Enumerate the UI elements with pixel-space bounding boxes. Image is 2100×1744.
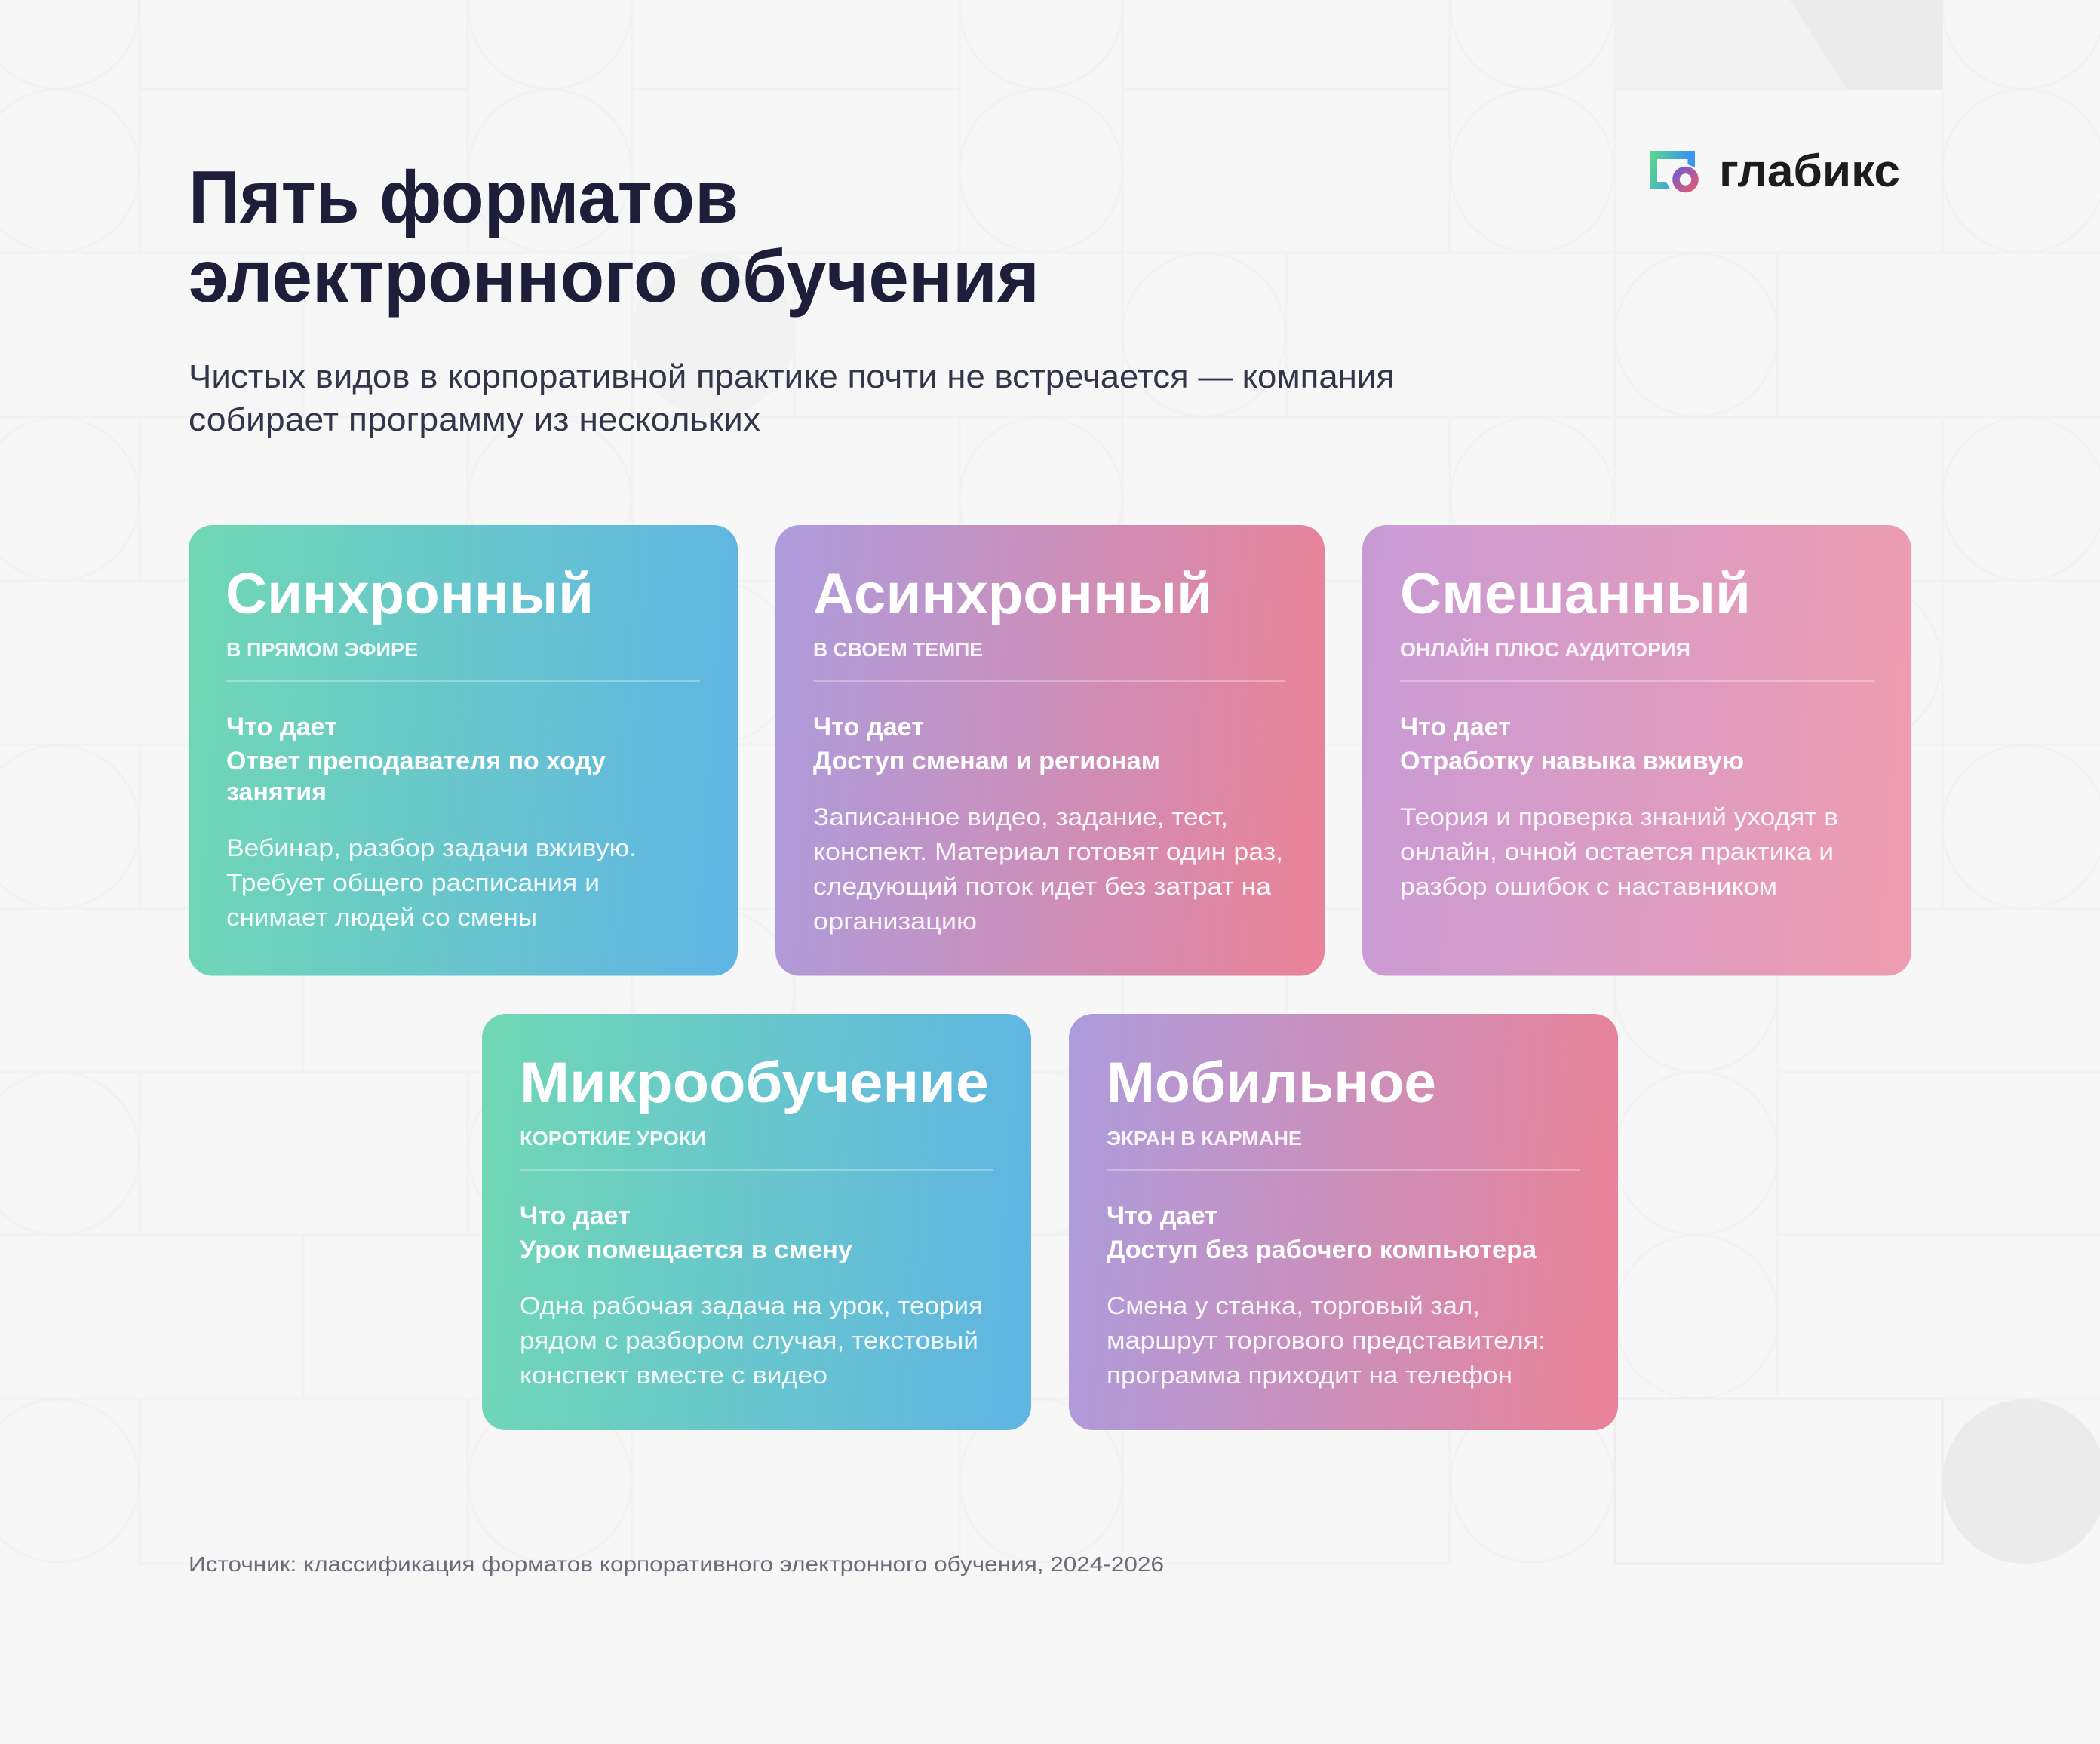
subtitle: собирает программу из нескольких [189, 401, 760, 438]
card description: Вебинар, разбор задачи вживую. [226, 834, 637, 861]
card description: Теория и проверка знаний уходят в [1400, 803, 1838, 831]
card benefit [1107, 1202, 1537, 1264]
card label: ЭКРАН В КАРМАНЕ [1107, 1127, 1302, 1150]
source note: Источник: классификация форматов корпоративного электронного обучения, 2024-2026 [189, 1552, 1164, 1576]
card benefit [520, 1202, 852, 1264]
card description: онлайн, очной остается практика и [1400, 838, 1834, 865]
card description: разбор ошибок с наставником [1400, 873, 1777, 900]
title [189, 155, 1039, 318]
card heading: Синхронный [226, 562, 594, 626]
card description: Смена у станка, торговый зал, [1107, 1292, 1480, 1319]
icon: logo ring [1676, 170, 1695, 189]
card description: следующий поток идет без затрат на [813, 873, 1271, 900]
logo wordmark: глабикс [1719, 146, 1900, 196]
card description: Одна рабочая задача на урок, теория [520, 1292, 983, 1319]
panel: Микрообучение [482, 1014, 1031, 1430]
panel: Смешанный [1362, 525, 1911, 976]
card description: маршрут торгового представителя: [1107, 1327, 1546, 1354]
card label: В ПРЯМОМ ЭФИРЕ [226, 638, 418, 661]
card benefit: Урок помещается в смену [520, 1236, 852, 1264]
card description: программа приходит на телефон [1107, 1362, 1512, 1389]
icon: logo frame [1650, 151, 1695, 189]
subtitle: Чистых видов в корпоративной практике почти не встречается — компания [189, 358, 1395, 395]
card description [1400, 803, 1838, 900]
title: электронного обучения [189, 235, 1039, 318]
background shape: filled circle behind title [632, 253, 795, 416]
card description: рядом с разбором случая, текстовый [520, 1327, 978, 1354]
background shape: bottom-right filled circle [1942, 1399, 2100, 1564]
panel: Синхронный [189, 525, 738, 976]
card benefit: занятия [226, 778, 327, 806]
card description: Записанное видео, задание, тест, [813, 803, 1228, 831]
card benefit: Отработку навыка вживую [1400, 747, 1744, 775]
card benefit [226, 713, 606, 806]
card benefit: Ответ преподавателя по ходу [226, 747, 606, 775]
card benefit: Что дает [226, 713, 337, 742]
card label: В СВОЕМ ТЕМПЕ [813, 638, 983, 661]
card description: конспект вместе с видео [520, 1362, 827, 1389]
card benefit: Доступ без рабочего компьютера [1107, 1236, 1537, 1264]
logo [1650, 146, 1900, 196]
card description: Требует общего расписания и [226, 869, 600, 896]
card label: КОРОТКИЕ УРОКИ [520, 1127, 706, 1150]
title: Пять форматов [189, 155, 738, 238]
card description [226, 834, 637, 931]
background shape: bottom-right rectangle outline [1615, 1399, 1942, 1564]
card heading: Асинхронный [813, 562, 1212, 626]
card description: конспект. Материал готовят один раз, [813, 838, 1283, 865]
card description: организацию [813, 907, 977, 935]
panel: Мобильное [1069, 1014, 1618, 1430]
card label: ОНЛАЙН ПЛЮС АУДИТОРИЯ [1400, 638, 1690, 661]
card benefit [1400, 713, 1744, 775]
card benefit [813, 713, 1160, 775]
background shape: top-right filled block [1614, 0, 1943, 90]
card description [813, 803, 1283, 935]
card benefit: Что дает [813, 713, 924, 742]
card heading: Смешанный [1400, 562, 1751, 626]
card benefit: Что дает [520, 1202, 631, 1230]
card description: снимает людей со смены [226, 904, 537, 931]
card description [520, 1292, 983, 1389]
card benefit: Что дает [1400, 713, 1511, 742]
panel: Асинхронный [775, 525, 1325, 976]
subtitle [189, 358, 1395, 438]
card benefit: Что дает [1107, 1202, 1217, 1230]
card heading: Микрообучение [520, 1051, 989, 1115]
card heading: Мобильное [1107, 1051, 1436, 1115]
card description [1107, 1292, 1546, 1389]
card benefit: Доступ сменам и регионам [813, 747, 1160, 775]
